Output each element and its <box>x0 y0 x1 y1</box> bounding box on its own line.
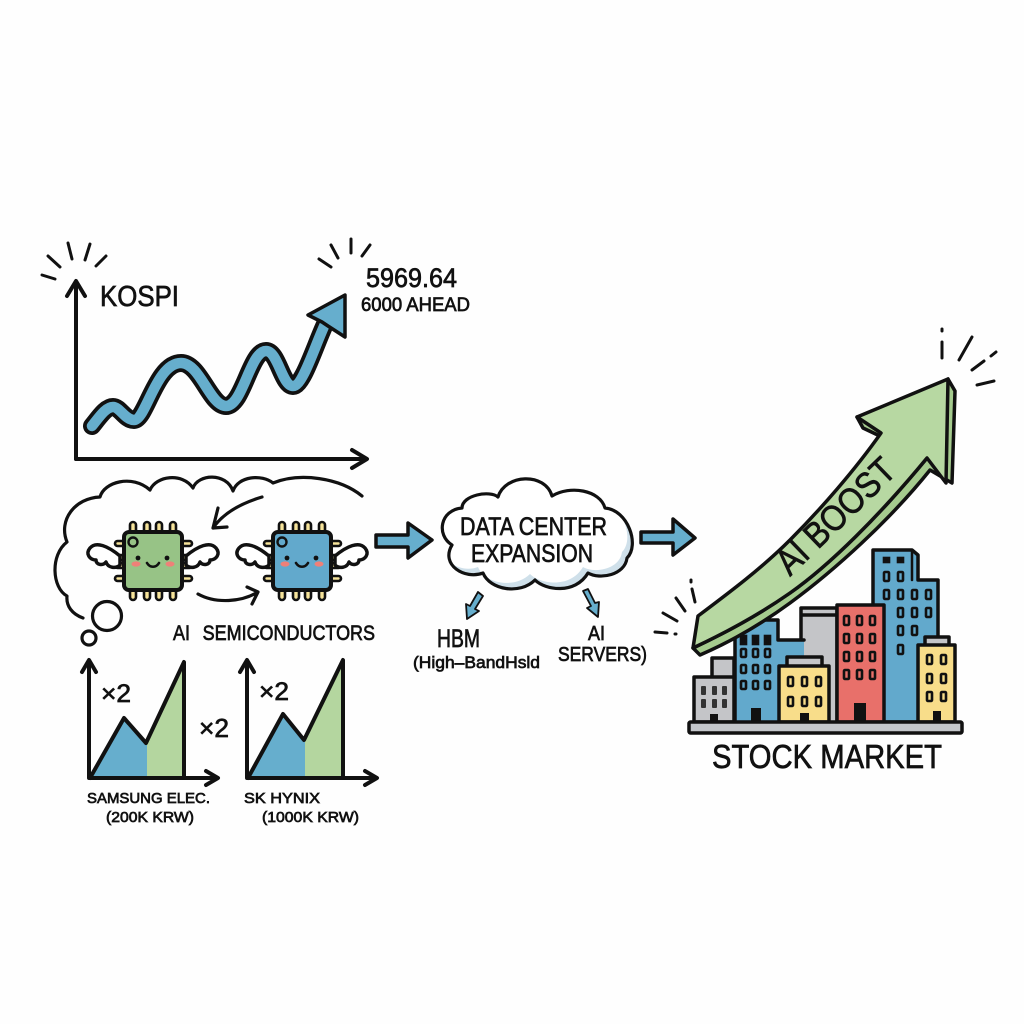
chip: blue <box>237 522 367 600</box>
cloud label line 1: DATA CENTER <box>460 513 607 541</box>
building: back gray <box>801 608 837 722</box>
area chart fill <box>90 662 184 778</box>
target price: (1000K KRW) <box>262 809 359 826</box>
building: red <box>837 605 884 722</box>
cycle arrow bottom <box>198 587 258 604</box>
building: yellow right <box>918 637 955 722</box>
KOSPI heading: KOSPI <box>100 281 179 313</box>
spark marks: KOSPI <box>42 239 370 279</box>
chip: green <box>88 522 218 600</box>
multiplier: ×2 <box>259 678 289 706</box>
arrow to AI servers <box>583 589 599 617</box>
label 6000 ahead: 6000 AHEAD <box>361 295 470 316</box>
thought bubble large <box>92 602 122 630</box>
label servers: SERVERS) <box>558 644 647 666</box>
label HBM: HBM <box>437 625 480 653</box>
arrow 3D edge <box>693 379 955 655</box>
target price: (200K KRW) <box>106 809 194 826</box>
arrow: data center to stock market <box>641 519 695 555</box>
rising line arrow <box>92 295 345 426</box>
arrow head edge <box>857 417 884 437</box>
multiplier between charts: ×2 <box>199 713 229 743</box>
panel: KOSPI chart <box>42 239 470 468</box>
cycle arrow top <box>213 497 262 528</box>
building: small gray <box>694 658 734 722</box>
big arrow: AI boost <box>693 379 955 655</box>
spark marks: big arrow tail <box>655 580 695 634</box>
building: tall blue <box>873 550 938 722</box>
spark marks: big arrow tip <box>942 329 996 385</box>
axes <box>82 660 218 785</box>
cloud shape <box>437 473 632 589</box>
thought cloud outline <box>55 477 362 618</box>
panel: SK Hynix chart <box>240 660 377 826</box>
arrow face <box>693 379 948 648</box>
panel: data center cloud <box>413 473 647 672</box>
label AI semiconductors: AI SEMICONDUCTORS <box>173 622 375 645</box>
multiplier: ×2 <box>101 680 131 708</box>
cloud label line 2: EXPANSION <box>471 540 593 568</box>
arrow label: AI BOOST <box>767 449 903 583</box>
ground base <box>689 722 962 733</box>
area chart fill <box>248 660 343 778</box>
thought bubble small <box>82 631 96 645</box>
building: yellow left <box>779 657 829 722</box>
label high-bandwidth: (High–BandHsld <box>413 653 540 672</box>
building: blue mid <box>735 620 804 722</box>
chart axes <box>67 281 367 468</box>
arrow to HBM <box>466 592 483 619</box>
axes <box>240 660 377 785</box>
label AI: AI <box>588 623 605 645</box>
name: SK HYNIX <box>244 790 320 807</box>
value 5969.64: 5969.64 <box>366 263 457 293</box>
label stock market: STOCK MARKET <box>712 738 942 775</box>
arrow: chips to data center <box>376 523 432 558</box>
panel: AI semiconductors thought cloud <box>55 477 375 645</box>
panel: stock market city <box>689 550 962 775</box>
name: SAMSUNG ELEC. <box>87 790 210 807</box>
panel: Samsung chart <box>82 660 218 826</box>
